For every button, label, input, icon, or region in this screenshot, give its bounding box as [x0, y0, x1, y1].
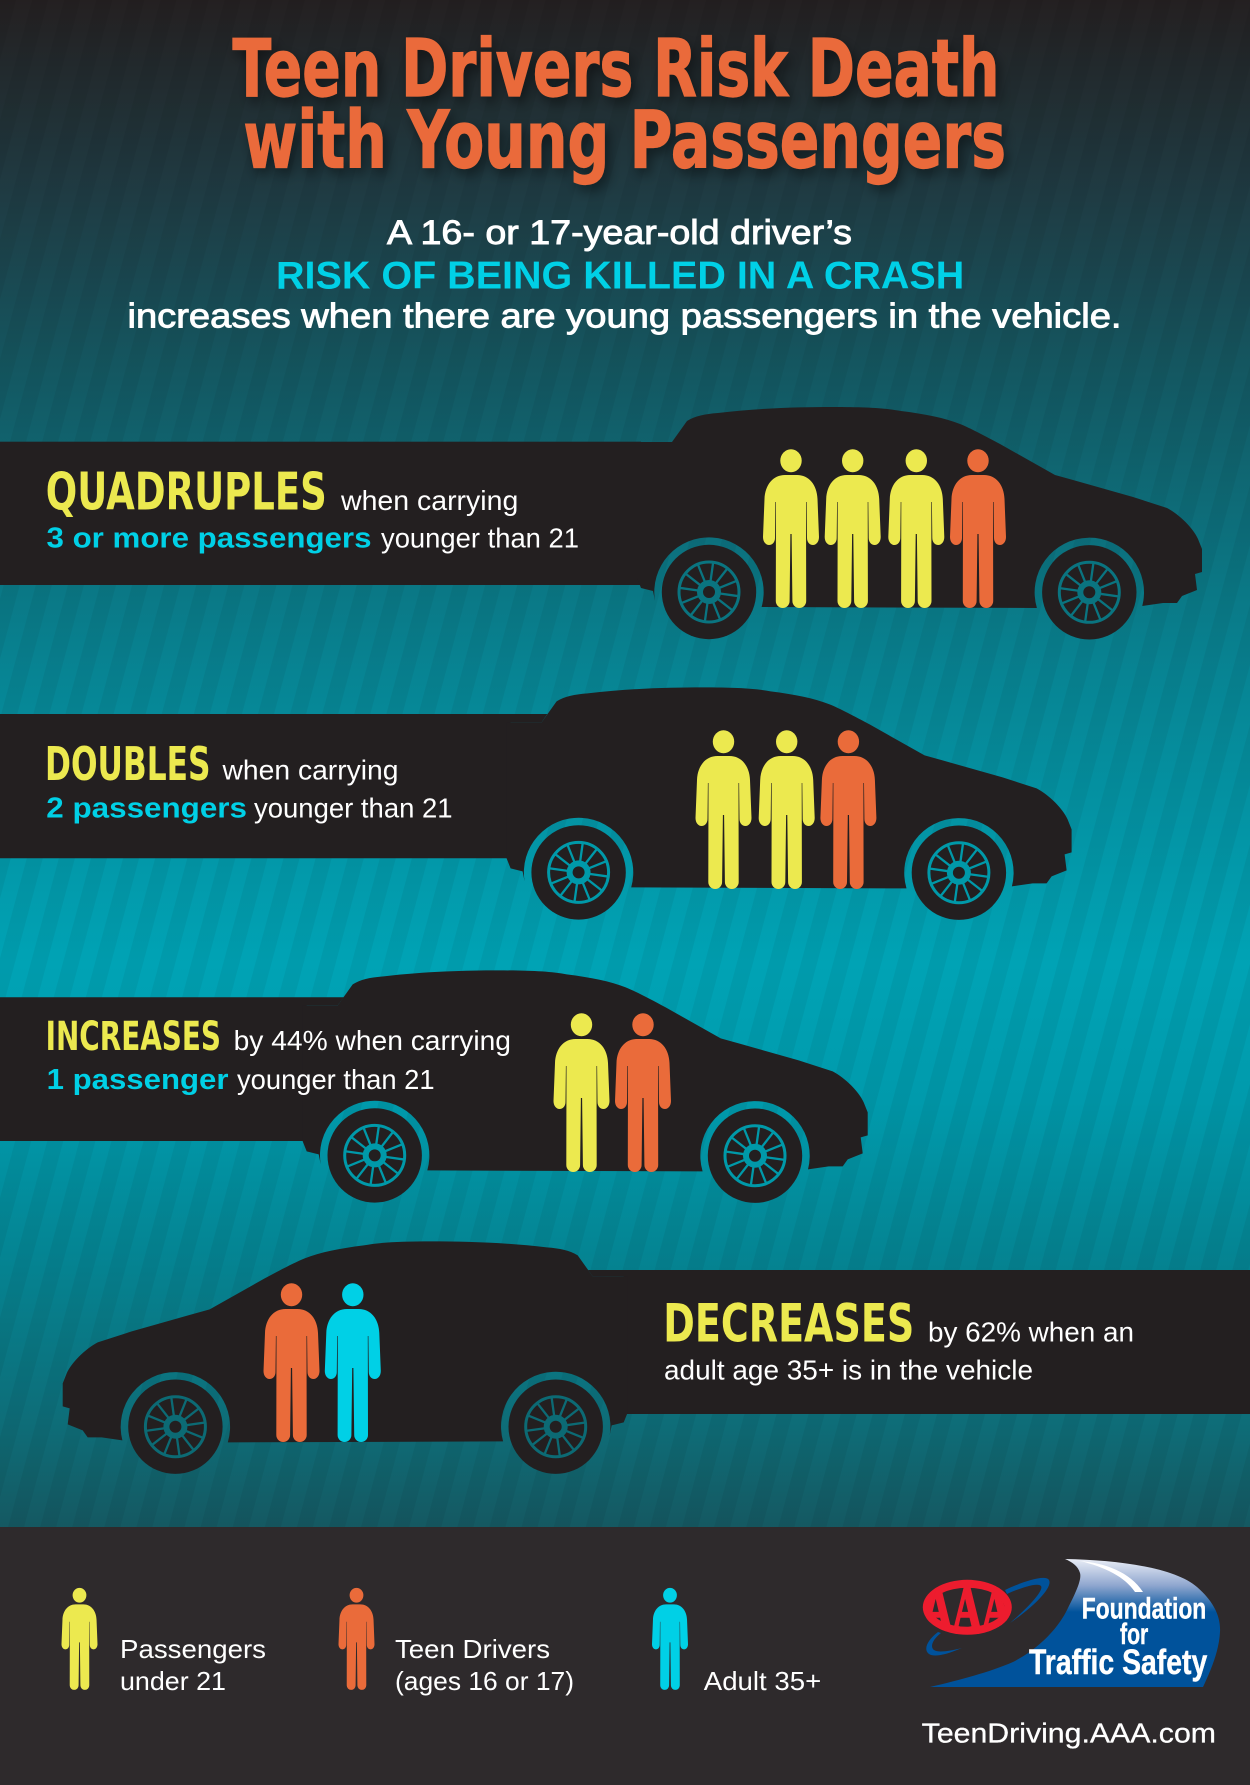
subtitle text block: RISK OF BEING KILLED IN A CRASH: [276, 254, 964, 297]
banner text: 1 passenger: [47, 1064, 228, 1096]
banner text: [46, 462, 579, 555]
banner text: by 62% when an: [928, 1317, 1134, 1348]
banner text: when carrying: [340, 485, 518, 516]
banner bar: [0, 714, 547, 858]
banner text: younger than 21: [237, 1064, 435, 1095]
legend: adult 35+: Adult 35+: [704, 1666, 821, 1696]
logo: AAA Foundation for Traffic Safety: [923, 1559, 1220, 1687]
panel: doubles: [0, 687, 1072, 920]
banner text: by 44% when carrying: [234, 1025, 511, 1056]
panel: increases: [0, 970, 868, 1203]
title: with Young Passengers: [243, 95, 1006, 187]
AAA orbit: [926, 1578, 1050, 1655]
panel: footer legend: [0, 1527, 1250, 1785]
banner bar: [588, 1270, 1250, 1414]
banner bar: [0, 997, 344, 1141]
subtitle text block: increases when there are young passengers in the vehicle.: [128, 298, 1122, 336]
car with teen driver and adult: [63, 1241, 628, 1474]
logo text: for: [1120, 1618, 1149, 1651]
banner text: INCREASES: [46, 1014, 221, 1060]
subtitle text block: [128, 214, 1122, 336]
car with three people: [507, 687, 1072, 920]
logo swoosh: [930, 1559, 1220, 1687]
banner text: [46, 1014, 511, 1096]
banner text: QUADRUPLES: [46, 462, 327, 522]
legend: teen drivers: Teen Drivers: [395, 1634, 550, 1664]
legend: adult 35+: [652, 1588, 821, 1696]
legend: passengers under 21: [61, 1588, 266, 1696]
banner text: when carrying: [221, 754, 398, 785]
panel: quadruples: [0, 407, 1202, 640]
AAA oval: AAA: [923, 1576, 1011, 1644]
banner text: adult age 35+ is in the vehicle: [664, 1354, 1033, 1385]
car with four people: [637, 407, 1202, 640]
banner text: DECREASES: [663, 1294, 914, 1355]
banner text: [663, 1294, 1134, 1385]
banner text: 2 passengers: [46, 792, 247, 824]
logo text: Traffic Safety: [1029, 1643, 1208, 1682]
logo text: [1029, 1592, 1208, 1682]
legend: passengers under 21: Passengers: [120, 1634, 266, 1664]
banner text: younger than 21: [381, 523, 579, 554]
AAA oval: [922, 1580, 1012, 1635]
legend: teen drivers: [338, 1588, 574, 1696]
legend: teen drivers: (ages 16 or 17): [395, 1666, 574, 1696]
website url: TeenDriving.AAA.com: [922, 1717, 1216, 1748]
legend: passengers under 21: under 21: [120, 1666, 226, 1696]
banner text: [45, 737, 453, 824]
banner text: younger than 21: [254, 792, 453, 823]
title: [232, 23, 1006, 187]
banner text: 3 or more passengers: [46, 523, 372, 555]
subtitle text block: A 16- or 17-year-old driver’s: [387, 214, 852, 252]
car with two people: [303, 970, 868, 1203]
panel: decreases: [63, 1241, 1250, 1474]
banner text: DOUBLES: [45, 737, 210, 791]
banner bar: [0, 442, 641, 585]
logo text: Foundation: [1082, 1592, 1206, 1625]
